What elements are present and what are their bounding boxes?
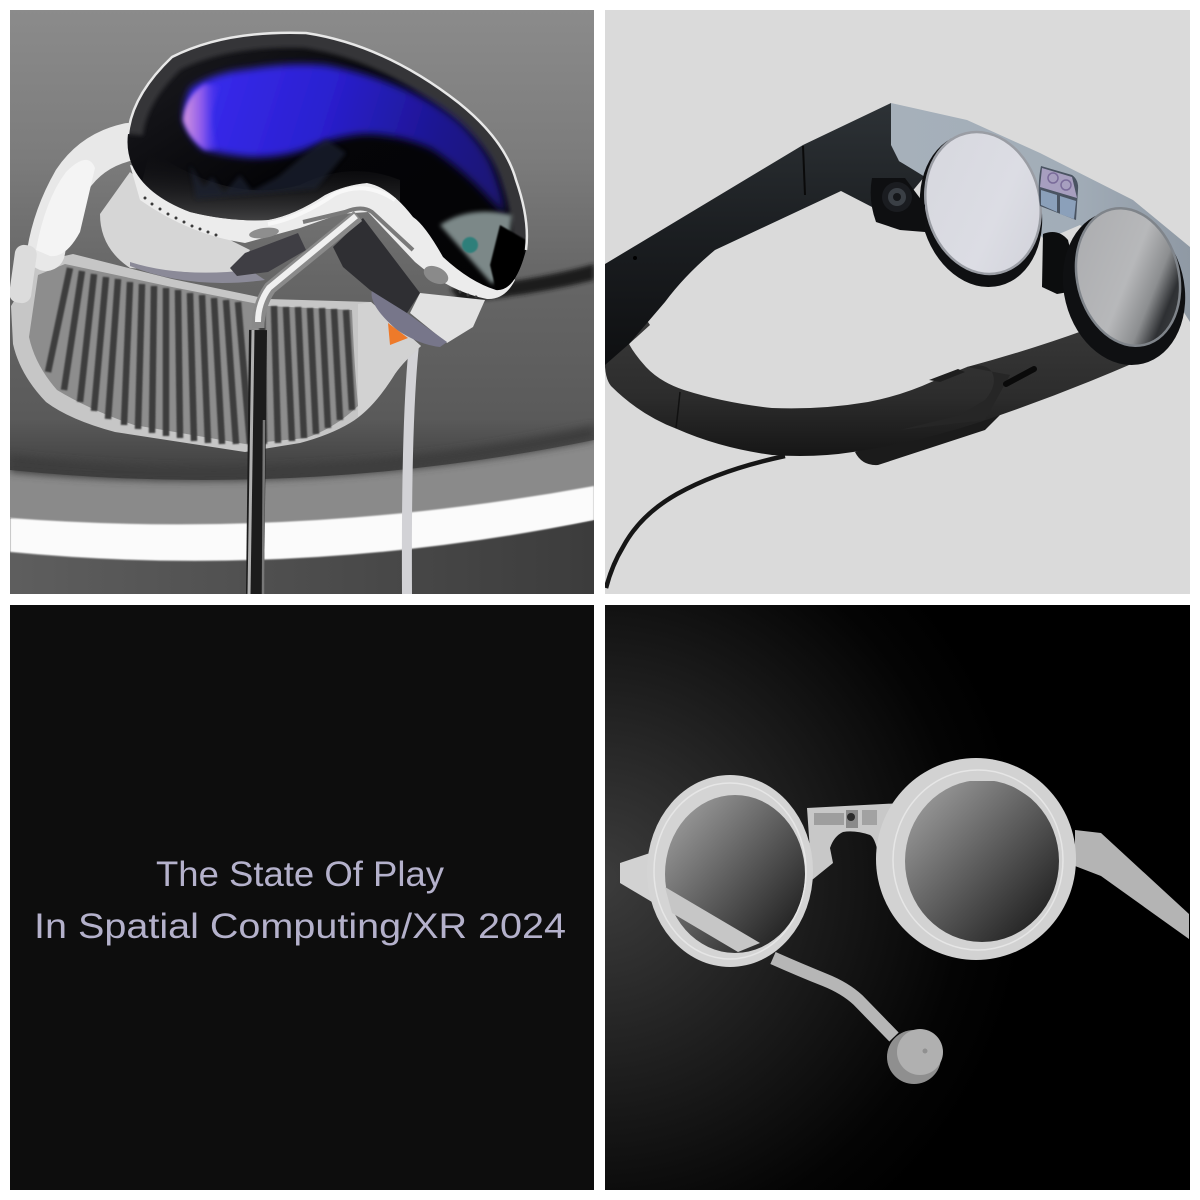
title: In Spatial Computing/XR 2024 <box>34 907 566 946</box>
title: The State Of Play <box>156 855 445 894</box>
panel: clear glasses photo <box>605 605 1190 1190</box>
icon: nose sensors <box>1039 166 1078 220</box>
icon: left hinge <box>620 853 652 902</box>
icon: left lens <box>924 130 1042 276</box>
icon: right lens <box>1074 207 1182 347</box>
icon: near temple arm <box>773 958 894 1037</box>
panel: headset photo top left <box>8 10 594 594</box>
icon: far temple arm <box>1075 830 1189 939</box>
icon: gray seal pads <box>130 218 485 347</box>
icon: side strap <box>8 142 128 304</box>
icon: white body frame <box>130 165 515 299</box>
icon: orange tab <box>388 323 408 345</box>
icon: right lens and frame <box>876 758 1076 960</box>
icon: ear tip <box>887 1029 943 1084</box>
icon: side camera <box>871 178 925 232</box>
icon: bridge <box>807 804 892 880</box>
icon: knit headband <box>11 254 421 452</box>
icon: chrome trim and sensors <box>144 188 478 298</box>
panel: AR headset photo top right <box>605 10 1200 594</box>
icon: curved glass visor <box>128 33 527 290</box>
icon: cable <box>606 456 785 588</box>
title <box>34 855 566 946</box>
icon: left lens and frame <box>647 775 813 967</box>
icon: cable <box>407 345 414 594</box>
panel: title card <box>10 605 594 1190</box>
icon: frame temple <box>605 103 925 365</box>
icon: headband loop <box>605 322 1130 456</box>
icon: display stand <box>249 216 358 594</box>
icon: lower rims <box>920 138 1186 365</box>
icon: under clip <box>855 415 1000 465</box>
icon: top plate <box>891 103 1190 322</box>
icon: mesh light seal <box>100 172 250 276</box>
